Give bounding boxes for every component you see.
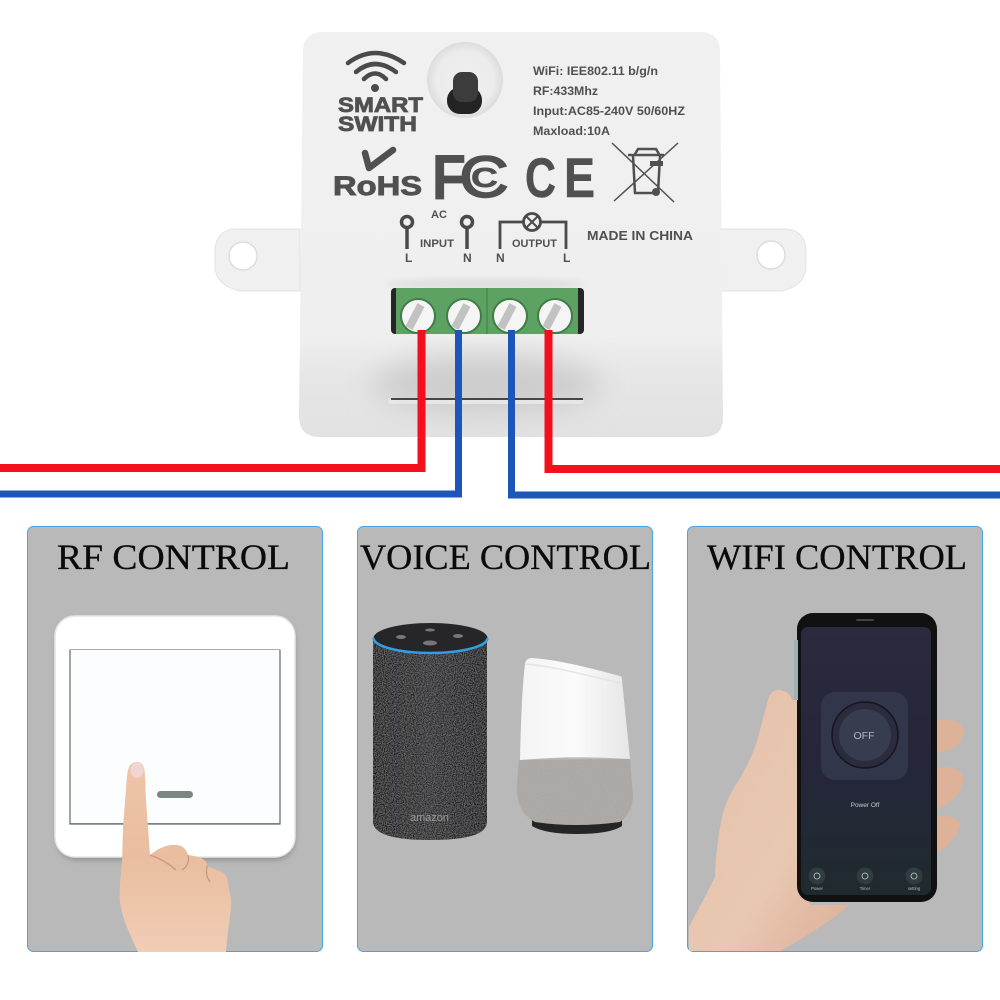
FCC mark: C xyxy=(471,162,498,193)
specifications text xyxy=(533,64,685,138)
blue wire left xyxy=(0,330,458,494)
input labels: AC xyxy=(431,209,447,221)
heading: VOICE CONTROL xyxy=(360,537,651,577)
amazon speaker xyxy=(373,623,488,840)
FCC mark: F xyxy=(432,143,466,213)
panel background xyxy=(358,526,652,952)
power control xyxy=(808,868,826,891)
panel: wifi control xyxy=(688,526,982,952)
setting control xyxy=(906,868,922,891)
blue wire right xyxy=(512,330,1000,495)
output labels: OUTPUT xyxy=(512,238,557,250)
wires xyxy=(0,330,1000,495)
specifications text: RF:433Mhz xyxy=(533,84,598,98)
CE mark: C xyxy=(525,146,556,209)
wall switch xyxy=(55,616,295,860)
input labels: L xyxy=(405,251,412,265)
input labels: N xyxy=(463,251,472,265)
right mounting ear xyxy=(718,229,806,291)
setting control: setting xyxy=(908,886,921,891)
input labels xyxy=(405,209,472,265)
timer control: Timer xyxy=(860,886,871,891)
RoHS mark: RoHS xyxy=(333,171,422,201)
CE mark: E xyxy=(564,146,595,209)
panel background xyxy=(688,526,982,952)
fingers xyxy=(925,720,964,855)
reset button xyxy=(427,42,503,118)
fingernail xyxy=(130,762,144,778)
icon: wifi xyxy=(348,53,404,92)
heading: RF CONTROL xyxy=(57,537,290,577)
smart switch label xyxy=(338,94,423,136)
red wire left xyxy=(0,330,422,468)
off dial xyxy=(832,702,898,768)
smart switch label: SWITH xyxy=(338,113,417,136)
vent slot xyxy=(388,398,584,404)
amazon wordmark: amazon xyxy=(410,812,449,824)
panel: voice control xyxy=(358,526,652,952)
phone xyxy=(794,613,937,902)
left mounting ear xyxy=(215,229,300,291)
hand pressing switch xyxy=(120,762,231,952)
power control: Power xyxy=(811,886,824,891)
module body xyxy=(299,32,723,437)
specifications text: WiFi: IEE802.11 b/g/n xyxy=(533,64,658,78)
google home speaker xyxy=(517,658,633,834)
output labels xyxy=(496,238,570,265)
red wire right xyxy=(548,330,1000,469)
panel: RF control xyxy=(28,526,322,952)
smart switch label: SMART xyxy=(338,94,423,117)
hand palm and thumb xyxy=(689,690,964,951)
output labels: L xyxy=(563,251,570,265)
off text: OFF xyxy=(854,730,874,742)
icon: crossed-out bin xyxy=(612,143,678,202)
made in china label: MADE IN CHINA xyxy=(587,228,694,243)
off button card xyxy=(821,692,908,780)
screws xyxy=(401,299,572,333)
heading: WIFI CONTROL xyxy=(707,537,967,577)
timer control xyxy=(856,868,874,891)
specifications text: Input:AC85-240V 50/60HZ xyxy=(533,104,685,118)
input labels: INPUT xyxy=(420,238,454,250)
terminal block xyxy=(391,288,584,334)
output labels: N xyxy=(496,251,505,265)
RoHS mark xyxy=(333,150,422,201)
FCC mark: C xyxy=(459,145,509,210)
panel background xyxy=(28,526,322,952)
device: smart switch module xyxy=(215,32,806,437)
output lamp diagram xyxy=(500,214,566,249)
status text: Power Off xyxy=(851,802,880,809)
specifications text: Maxload:10A xyxy=(533,124,610,138)
indicator light xyxy=(157,791,193,798)
FCC mark xyxy=(432,143,509,213)
input terminals diagram xyxy=(402,216,472,249)
CE mark xyxy=(525,146,595,209)
